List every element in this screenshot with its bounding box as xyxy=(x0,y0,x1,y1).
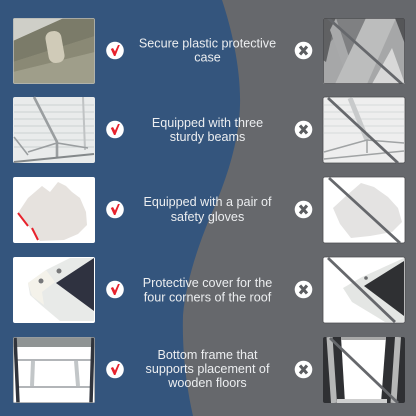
row 1: text: case xyxy=(194,50,221,64)
row 5: text: wooden floors xyxy=(167,376,247,390)
row 5: x icon xyxy=(295,361,312,378)
row 5: text: Bottom frame that xyxy=(157,348,258,362)
row 2: text: Equipped with three xyxy=(152,116,263,130)
row 3: check icon xyxy=(106,201,124,218)
row 5: text: supports placement of xyxy=(146,362,270,376)
background: blue panel xyxy=(0,0,240,416)
row 4: x icon xyxy=(295,281,312,298)
row 2: bad photo xyxy=(323,97,405,163)
row 3: text: safety gloves xyxy=(171,210,244,224)
row 1: text: Secure plastic protective xyxy=(139,36,276,50)
row 4: bad photo xyxy=(323,257,405,323)
row 5: good photo, bottom frame xyxy=(13,337,95,403)
row 2: text: sturdy beams xyxy=(170,130,245,144)
row 1: x icon xyxy=(295,42,312,59)
row 4: good photo, corner cover xyxy=(13,257,95,323)
row 1: bad photo xyxy=(323,18,405,84)
row 2: check icon xyxy=(106,121,124,138)
row 1: check icon xyxy=(106,42,124,59)
row 2: x icon xyxy=(295,121,312,138)
row 3: text: Equipped with a pair of xyxy=(143,195,272,209)
row 4: text: Protective cover for the xyxy=(143,276,272,290)
row 2: good photo, beams xyxy=(13,97,95,163)
row 5: bad photo xyxy=(323,337,405,403)
row 3: bad photo xyxy=(323,177,405,243)
row 3: good photo, gloves xyxy=(13,177,95,243)
row 5: check icon xyxy=(106,361,124,378)
row 4: check icon xyxy=(106,281,124,298)
row 1: good photo, plastic case xyxy=(13,18,95,84)
row 3: x icon xyxy=(295,201,312,218)
row 4: text: four corners of the roof xyxy=(144,290,272,304)
